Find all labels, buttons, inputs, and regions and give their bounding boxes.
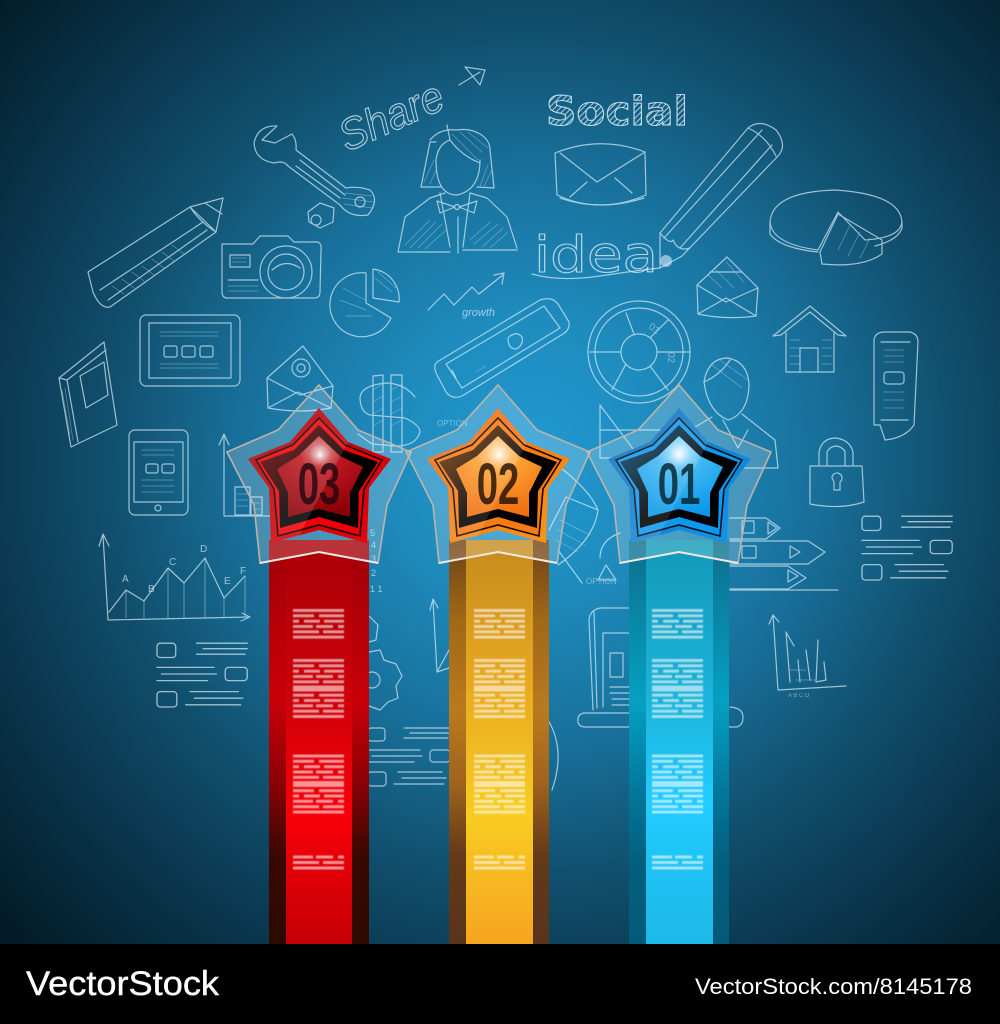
doodle: scale digits and left arrow: 3 xyxy=(371,554,376,564)
star badge: 02: 02 xyxy=(477,453,519,517)
doodle: sphere and option pin xyxy=(437,419,620,586)
doodle: right text block xyxy=(862,516,952,580)
doodle: laptop xyxy=(578,608,743,727)
doodle: share text: Share xyxy=(331,72,452,161)
footer logo: VectorStock xyxy=(26,965,220,1003)
doodle: scale digits and left arrow: 5 xyxy=(370,528,375,538)
doodle: camera xyxy=(222,236,321,298)
doodle: small bar chart xyxy=(769,615,846,699)
doodle: scale digits and left arrow: 2 xyxy=(371,568,376,578)
doodle: gears xyxy=(364,616,402,710)
star badge: 01: 01 xyxy=(658,453,700,517)
doodle: growth arrow xyxy=(428,273,504,319)
doodle: arrow tags xyxy=(730,518,838,590)
doodle: donut chart: 01 xyxy=(646,321,662,337)
star badge: 02 xyxy=(406,385,590,563)
doodle: line chart: C xyxy=(169,557,176,568)
doodle: lock xyxy=(810,438,864,507)
doodle: growth arrow: growth xyxy=(462,307,495,319)
doodle: line chart: E xyxy=(224,576,231,587)
doodle: tablet xyxy=(140,315,240,386)
doodle: email envelope xyxy=(267,346,333,411)
star badge: 03: 03 xyxy=(298,453,340,517)
doodles xyxy=(59,67,952,790)
column: 03 red xyxy=(269,540,369,944)
footer bar xyxy=(0,944,1000,1024)
column: 02 orange xyxy=(449,540,549,944)
doodle: smartphone xyxy=(435,299,569,397)
star badge: 03 xyxy=(227,385,411,563)
doodle: dollar sign xyxy=(358,375,420,452)
text lines: blue column xyxy=(652,609,703,870)
doodle: line chart: A xyxy=(122,574,129,585)
doodle: scale digits and left arrow: 1 1 xyxy=(370,584,383,594)
footer url: VectorStock.com/8145178 xyxy=(695,974,972,999)
doodle: open envelope xyxy=(697,257,758,318)
doodle: line chart: F xyxy=(240,566,246,577)
doodle: bar chart xyxy=(219,434,270,516)
doodle: line chart: D xyxy=(200,544,207,555)
doodle: pencil left xyxy=(88,198,223,307)
doodle: sphere and option pin: OPTION xyxy=(586,577,617,586)
doodle: lower left text block xyxy=(157,643,247,707)
text lines: orange column xyxy=(474,609,525,870)
doodle: line chart: B xyxy=(148,584,155,595)
doodle: line chart xyxy=(99,534,250,621)
doodle: woman xyxy=(398,125,517,253)
doodle: social text: Social xyxy=(546,89,688,135)
doodle: scale digits and left arrow: 4 xyxy=(371,540,376,550)
doodle: centre text block xyxy=(368,728,450,786)
doodle: 3D pie xyxy=(770,190,902,265)
star badge: 01 xyxy=(587,385,771,563)
doodle: man xyxy=(600,358,778,468)
doodle: wrench xyxy=(254,126,375,228)
text lines: red column xyxy=(293,609,344,870)
doodle: book xyxy=(59,342,117,447)
doodle: donut chart: 02 xyxy=(665,352,676,364)
doodle: scale digits and left arrow xyxy=(370,528,558,790)
doodle: house xyxy=(773,306,846,372)
doodle: big pencil xyxy=(660,123,783,268)
doodle: idea text: idea xyxy=(534,226,658,284)
doodle: donut chart xyxy=(588,301,690,403)
doodle: phone right xyxy=(874,332,918,440)
doodle: envelope xyxy=(555,144,646,205)
column: 01 blue xyxy=(629,540,729,944)
doodle: phone left xyxy=(129,430,188,515)
doodle: sphere and option pin: OPTION xyxy=(437,419,468,428)
doodle: small bar chart: A B C D xyxy=(788,693,810,699)
doodle: small pie xyxy=(330,269,399,337)
